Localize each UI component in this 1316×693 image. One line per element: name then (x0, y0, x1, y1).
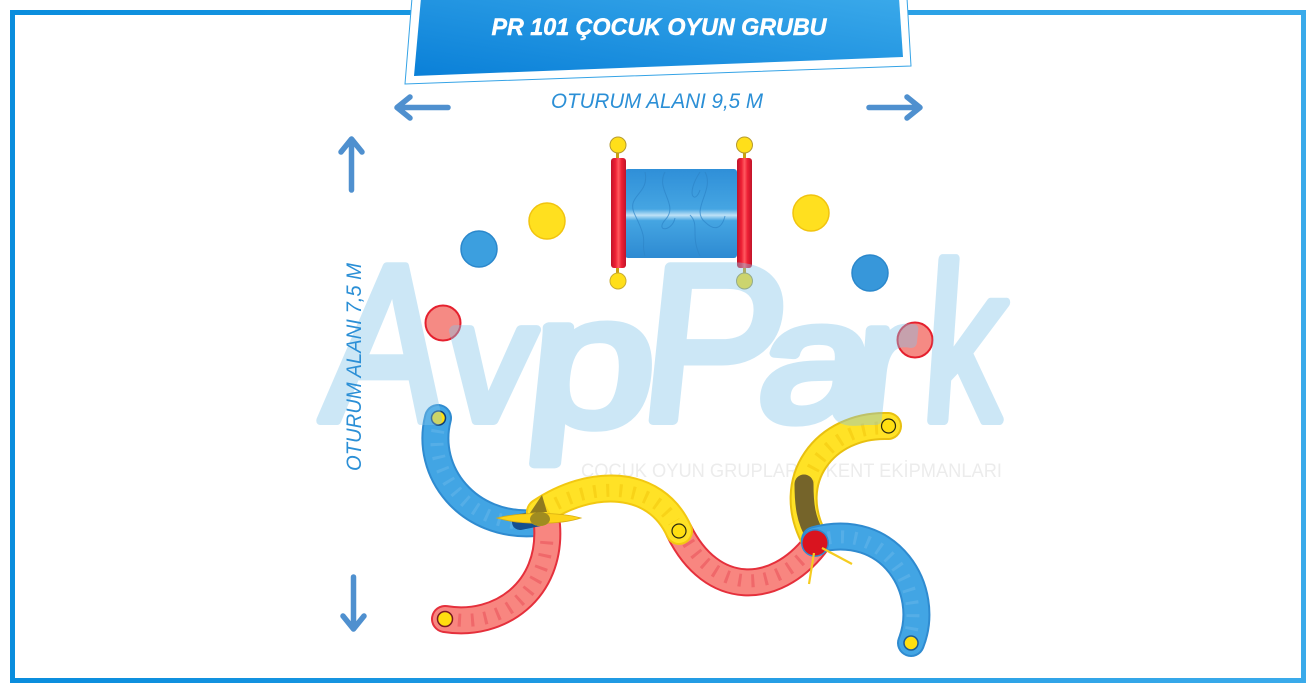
spinner shadow (530, 495, 547, 513)
top-right post (736, 137, 752, 160)
left spinner (497, 495, 581, 526)
watermark wordmark: AvpPark: k (917, 221, 1015, 468)
width dimension (397, 90, 920, 118)
watermark tagline: ÇOCUK OYUN GRUPLARI & KENT EKİPMANLARI (581, 461, 1002, 482)
arrow down (343, 577, 364, 629)
watermark wordmark: AvpPark (315, 219, 1015, 468)
arrow right (869, 97, 920, 118)
red hub (802, 530, 828, 556)
disc: yellow right (793, 195, 829, 231)
peg: red bottom (438, 612, 452, 626)
track shadow on yellow (804, 484, 815, 535)
track: yellow centre (540, 488, 679, 531)
banner title: PR 101 ÇOCUK OYUN GRUBU (492, 14, 828, 41)
right red frame (737, 158, 752, 268)
arrow up (341, 139, 362, 190)
tunnel embossed pattern (633, 172, 725, 256)
peg: blue bottom (904, 636, 918, 650)
spinner hub (530, 512, 550, 526)
tunnel (610, 137, 752, 289)
banner outer outline (405, 0, 911, 84)
peg: blue top (432, 411, 446, 425)
yellow rods (809, 548, 852, 584)
watermark wordmark: AvpPark: P (631, 220, 799, 468)
stepping discs (426, 195, 932, 358)
watermark wordmark: AvpPark: v (440, 266, 543, 456)
width label: OTURUM ALANI 9,5 M (551, 90, 763, 113)
tunnel body (625, 169, 737, 258)
height label: OTURUM ALANI 7,5 M (343, 263, 366, 471)
height dimension (341, 139, 366, 629)
disc: red left (426, 306, 460, 340)
hub ring (801, 529, 829, 557)
disc: yellow left (529, 203, 565, 239)
arrow left (397, 97, 448, 118)
spinner blade (497, 514, 581, 523)
watermark wordmark: AvpPark: A (315, 219, 460, 467)
top-left post (610, 137, 626, 160)
watermark wordmark: AvpPark: p (520, 258, 667, 464)
peg: yellow right (882, 419, 896, 433)
balance beam tracks (435, 418, 916, 643)
banner blue plate (414, 0, 903, 76)
watermark wordmark: AvpPark: a (751, 266, 885, 456)
track pegs (432, 411, 918, 650)
disc: red right (898, 322, 932, 358)
left red frame (611, 158, 626, 268)
track: blue right (815, 537, 916, 643)
peg: yellow centre (672, 524, 686, 538)
bottom-left post (610, 266, 626, 289)
dark blue junction (520, 518, 540, 522)
right spinner (801, 529, 852, 584)
disc: blue right (852, 255, 888, 291)
track: red centre (679, 531, 815, 582)
bottom-right post (736, 266, 752, 289)
track: red lower-left (445, 525, 547, 620)
track: yellow right (804, 426, 888, 540)
title banner (405, 0, 911, 84)
track: blue upper-left (435, 418, 535, 523)
disc: blue left (461, 231, 497, 267)
watermark wordmark: AvpPark: r (846, 267, 923, 457)
